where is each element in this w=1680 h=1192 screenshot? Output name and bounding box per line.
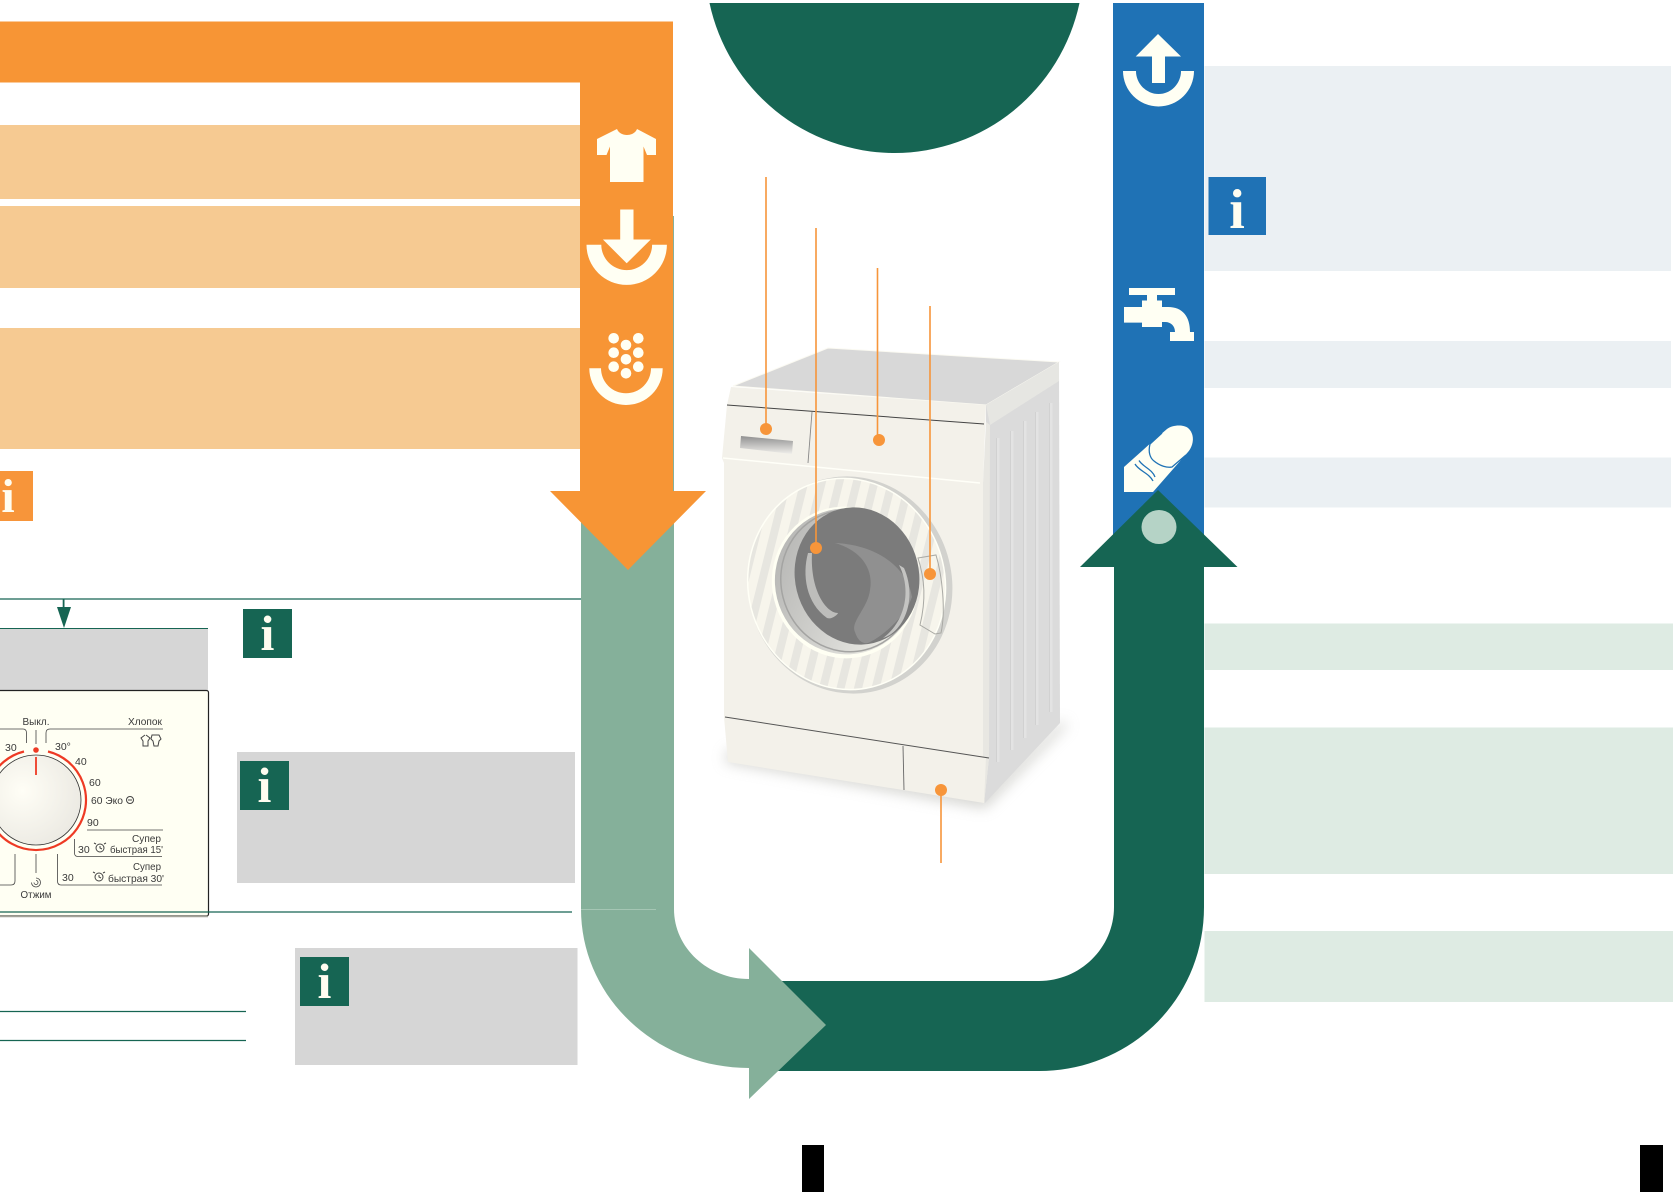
band: blue rinse column: [1113, 3, 1204, 543]
icon: blue info: [1208, 177, 1266, 241]
panel: green note 2: [1204, 728, 1673, 874]
arrow: to programme panel: [57, 599, 71, 628]
dial labels: 60: [89, 777, 101, 789]
band: light green curve: [581, 216, 826, 1099]
icon: green info 3: [300, 953, 349, 1009]
dial labels: быстрая 30': [108, 873, 164, 885]
door glass: [756, 491, 934, 674]
panel: green note 1: [1204, 624, 1673, 670]
detergent drawer handle: [740, 436, 793, 454]
door handle: [918, 555, 943, 634]
icon: orange info: i: [1, 470, 15, 523]
panel: blue note 1: [1204, 66, 1671, 271]
icon: green info 2: [240, 757, 289, 813]
panel: blue note 3: [1204, 458, 1671, 508]
panel: blue note 2: [1204, 341, 1671, 388]
dial labels: Выкл.: [22, 716, 50, 728]
icon: green info 1: i: [261, 605, 275, 661]
icon: shirt: [597, 129, 656, 182]
icon: orange info: [0, 470, 33, 523]
icon: load down arrow: [586, 209, 667, 285]
icon: blue info: i: [1229, 179, 1245, 241]
top dark green semicircle: [710, 3, 1080, 153]
machine top: [733, 348, 1059, 405]
section rule bottom: [0, 911, 572, 913]
table rules: [0, 1012, 246, 1040]
dial labels: Супер: [133, 861, 161, 873]
dial labels: 40: [75, 756, 87, 768]
illustration: washing machine: [722, 348, 1068, 808]
dial labels: Отжим: [20, 889, 52, 901]
dial labels: 60 Эко: [91, 795, 123, 807]
black marker right: [1640, 1145, 1663, 1192]
section rule top: [0, 598, 582, 600]
dial knob: [0, 747, 86, 850]
dial labels: Хлопок: [128, 716, 162, 728]
panel: orange notes 3: [0, 328, 580, 449]
arrowhead: dark green up: [1080, 490, 1238, 567]
dial labels: 30: [78, 844, 90, 856]
dial labels: 30: [5, 742, 17, 754]
panel: grey note 1: [237, 752, 575, 883]
leader lines and dots: [760, 177, 947, 863]
seam line: [581, 908, 656, 910]
dial guide lines: [0, 729, 163, 887]
icon: green info 2: i: [258, 757, 272, 813]
dial small symbols: [93, 735, 161, 881]
panel: control dial: [0, 690, 208, 916]
icon: detergent dots: [589, 333, 663, 405]
front edge band: [983, 422, 990, 803]
side upper band: [986, 362, 1059, 425]
status dot: [1142, 510, 1176, 544]
band: dark green curve: [750, 560, 1204, 1071]
dial labels: 90: [87, 817, 99, 829]
panel lines: [723, 405, 989, 790]
machine side: [985, 362, 1060, 803]
icon: finger press: [1124, 425, 1193, 492]
dial labels: Супер: [132, 833, 161, 845]
dial labels: 30: [62, 872, 74, 884]
panel: orange notes 1: [0, 125, 580, 199]
dial labels: [5, 716, 164, 901]
dial labels: быстрая 15': [110, 844, 163, 856]
icon: upload arrow: [1123, 34, 1194, 106]
icon: green info 3: i: [318, 953, 332, 1009]
icon: green info 1: [243, 605, 292, 661]
floor shadow: [725, 722, 1068, 808]
dial labels: 30°: [55, 741, 71, 753]
band: orange: [0, 22, 706, 570]
panel: green note 3: [1204, 931, 1673, 1002]
black marker left: [802, 1145, 824, 1192]
panel: programme heading: [0, 628, 208, 691]
panel: grey note 2: [295, 948, 578, 1065]
machine front: [722, 387, 989, 803]
icon: water tap: [1124, 288, 1194, 341]
panel: orange notes 2: [0, 206, 580, 288]
side ribs: [996, 403, 1051, 762]
door rim: [725, 455, 975, 715]
